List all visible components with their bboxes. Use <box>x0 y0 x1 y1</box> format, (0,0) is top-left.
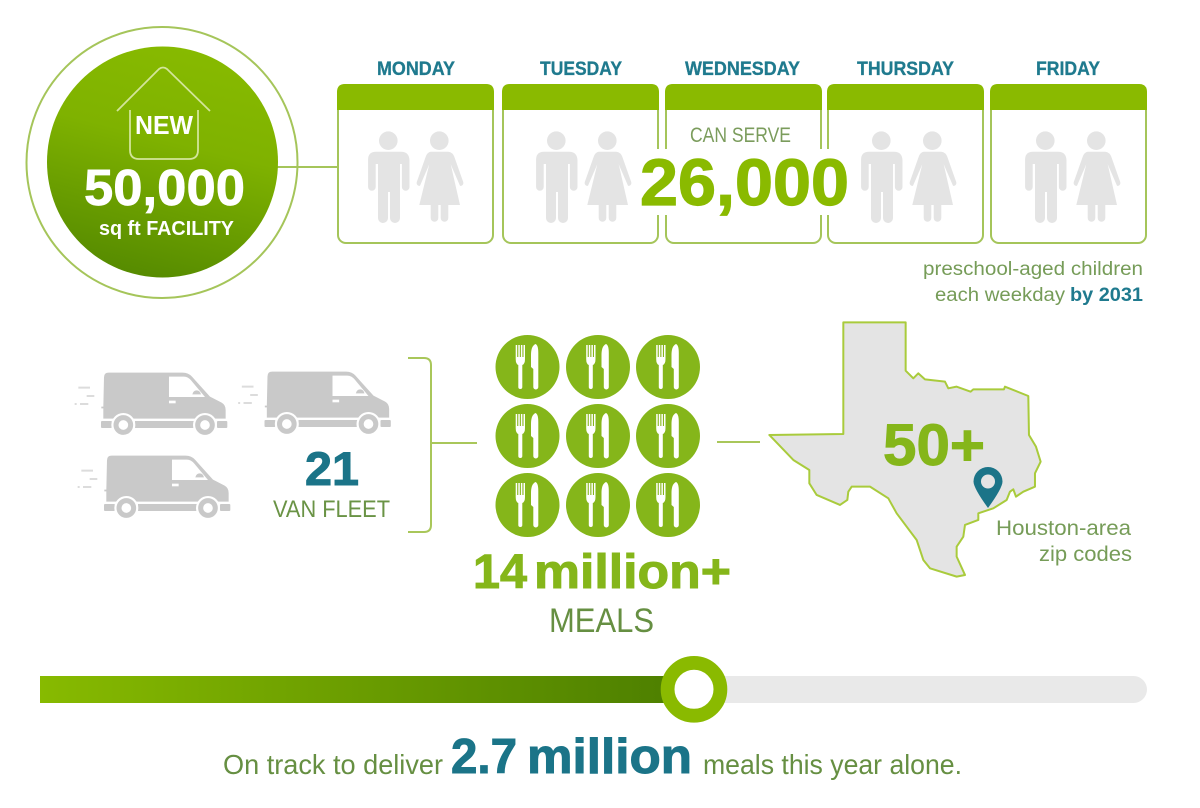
callout: can serve 26,000: 26,000 <box>640 145 849 219</box>
label: Houston-area zip codes <box>996 517 1132 566</box>
figure: 21 van fleet: 21 <box>305 442 359 495</box>
caption: on track to deliver 2.7 million: On track to deliver <box>223 749 443 780</box>
connector: meals to map <box>717 441 760 443</box>
panel: Monday card: MONDAY <box>377 59 455 80</box>
icon: house outline <box>117 68 210 159</box>
icon: van 3 <box>78 456 230 520</box>
icon grid: meal plates <box>496 335 700 537</box>
text block: preschool-aged children by 2031: each weekday <box>935 285 1066 306</box>
callout: can serve 26,000: CAN SERVE <box>690 124 791 147</box>
figure: 21 van fleet <box>273 442 390 523</box>
icon: van 2 <box>238 372 391 436</box>
figure: 14 million+ meals: million+ <box>534 546 731 599</box>
panel: Wednesday card: WEDNESDAY <box>685 59 800 80</box>
text block: preschool-aged children by 2031 <box>923 259 1143 306</box>
panel: Tuesday card: TUESDAY <box>540 59 622 80</box>
caption: on track to deliver 2.7 million: million <box>527 730 692 784</box>
panel: Friday card: FRIDAY <box>1036 59 1100 80</box>
figure: 14 million+ meals: 14 <box>473 546 527 599</box>
panel: Thursday card <box>827 59 984 243</box>
bracket connector <box>408 358 477 532</box>
progress marker ring <box>668 663 720 716</box>
label: Houston-area zip codes: zip codes <box>1039 543 1132 566</box>
badge: new facility <box>26 27 298 298</box>
label: NEW: NEW <box>135 110 193 140</box>
caption: on track to deliver 2.7 million: meals this year alone. <box>703 749 962 780</box>
figure: 14 million+ meals: MEALS <box>549 602 654 640</box>
caption: on track to deliver 2.7 million <box>223 730 962 784</box>
text block: preschool-aged children by 2031: preschool-aged children <box>923 259 1143 280</box>
icon: van 1 <box>75 373 227 437</box>
progress bar <box>40 663 1147 716</box>
panel: Tuesday card <box>502 59 659 243</box>
figure: 21 van fleet: VAN FLEET <box>273 496 390 523</box>
map: Texas <box>769 322 1132 577</box>
figure: 14 million+ meals <box>473 546 731 640</box>
icon: map pin <box>974 467 1002 508</box>
panel: Thursday card: THURSDAY <box>857 59 954 80</box>
panel: Wednesday card <box>665 59 822 243</box>
figure: 50,000: 50,000 <box>84 159 245 216</box>
connector: facility to calendar <box>275 166 338 168</box>
text block: preschool-aged children by 2031: by 2031 <box>1070 285 1143 306</box>
figure: 50+: 50+ <box>883 413 985 478</box>
label: Houston-area zip codes: Houston-area <box>996 517 1131 540</box>
panel: Monday card <box>337 59 494 243</box>
label: sq ft facility: sq ft FACILITY <box>99 218 235 240</box>
caption: on track to deliver 2.7 million: 2.7 <box>451 730 517 784</box>
panel: Friday card <box>990 59 1147 243</box>
